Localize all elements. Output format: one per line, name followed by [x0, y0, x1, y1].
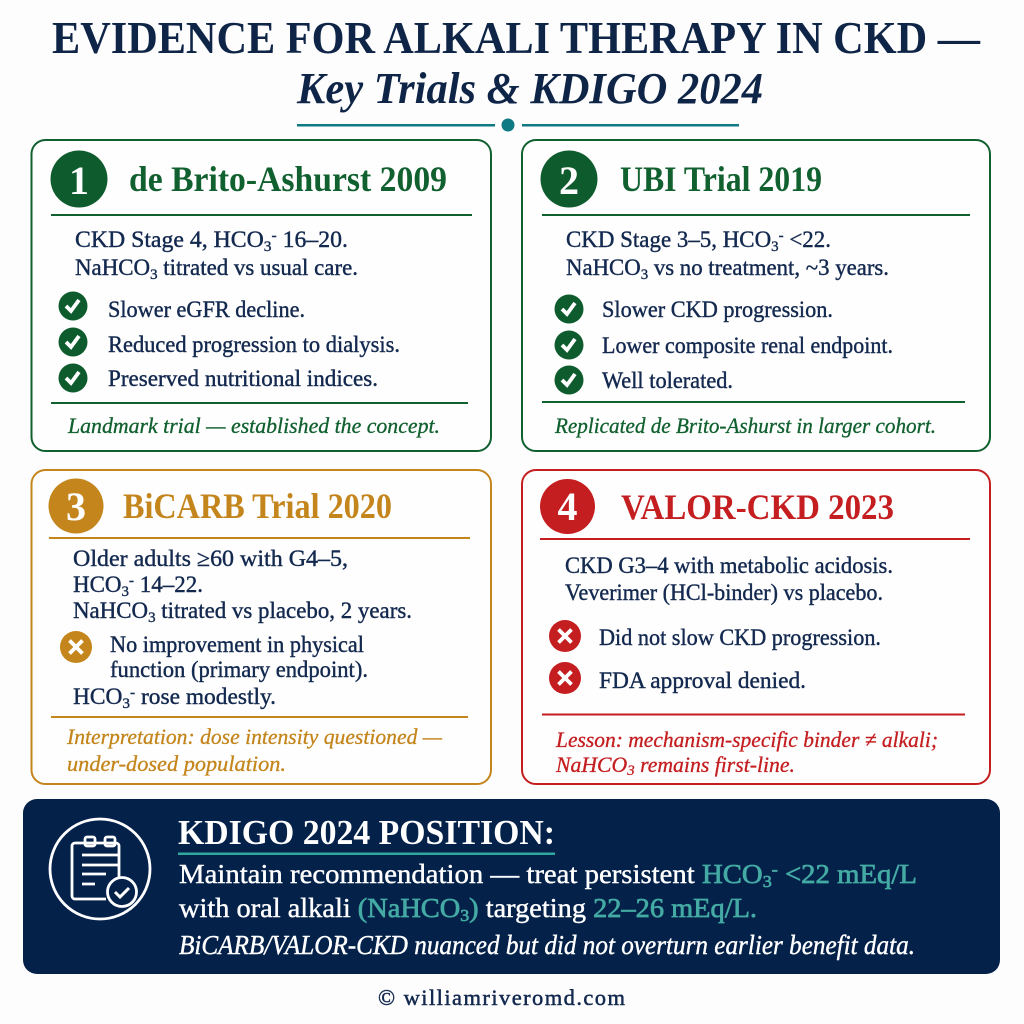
takeaway: Interpretation: dose intensity questioned —: [66, 724, 442, 749]
number badge 2: [540, 150, 598, 208]
title divider: [297, 118, 739, 132]
finding with cross icon: No improvement in physical: [110, 632, 364, 657]
title: Key Trials & KDIGO 2024: [296, 64, 763, 113]
number badge 1: [50, 150, 108, 208]
panel: UBI Trial 2019: [522, 140, 990, 451]
recommendation text: -: [772, 860, 778, 879]
panel: KDIGO 2024 position: [23, 799, 1000, 974]
takeaway: 3: [626, 763, 635, 779]
study description: CKD G3–4 with metabolic acidosis.: [565, 553, 893, 578]
findings with check icons: Slower CKD progression.: [602, 297, 833, 322]
heading: BiCARB Trial 2020: [123, 486, 392, 526]
bicarbonate note: -: [130, 685, 135, 701]
study description: [75, 227, 358, 283]
findings with check icons: Well tolerated.: [602, 368, 733, 393]
recommendation text: Maintain recommendation — treat persistent HCO: [179, 859, 759, 889]
recommendation text: 3: [460, 906, 469, 925]
recommendation text: with oral alkali (NaHCO: [179, 893, 455, 923]
study description: vs no treatment, ~3 years.: [648, 255, 889, 280]
heading: UBI Trial 2019: [620, 159, 822, 199]
study description: Veverimer (HCl-binder) vs placebo.: [565, 580, 883, 605]
recommendation text: <22 mEq/L: [778, 859, 917, 889]
bicarbonate note: rose modestly.: [135, 684, 276, 709]
number badge 1: 1: [69, 158, 89, 203]
panel: VALOR-CKD 2023: [522, 470, 990, 784]
study description: titrated vs usual care.: [158, 255, 358, 280]
study description: -: [779, 228, 784, 244]
number badge 2: 2: [559, 158, 579, 203]
study description: -: [129, 573, 134, 589]
study description: CKD Stage 3–5, HCO: [566, 227, 772, 252]
heading: KDIGO 2024 POSITION:: [178, 813, 555, 852]
finding with cross icon: function (primary endpoint).: [110, 657, 368, 682]
number badge 4: [540, 479, 595, 534]
findings with check icons: [58, 292, 400, 392]
number badge 3: 3: [66, 484, 86, 529]
findings with check icons: Preserved nutritional indices.: [108, 366, 378, 391]
findings with check icons: Lower composite renal endpoint.: [602, 333, 893, 358]
recommendation text: 3: [763, 872, 772, 891]
findings with check icons: [554, 294, 893, 394]
icon: clipboard with check: [50, 819, 150, 919]
footer credit: © williamriveromd.com: [378, 985, 625, 1010]
study description: 3: [641, 267, 648, 283]
takeaway: remains first-line.: [635, 752, 795, 777]
takeaway: [555, 727, 938, 779]
study description: 16–20.: [277, 227, 348, 252]
takeaway: Lesson: mechanism-specific binder ≠ alkali;: [555, 727, 938, 752]
recommendation text: targeting 22–26 mEq/L.: [485, 893, 749, 923]
findings with cross icons: [549, 620, 881, 694]
study description: <22.: [784, 227, 831, 252]
recommendation text: [179, 859, 917, 960]
study description: 3: [122, 584, 129, 600]
bicarbonate note: HCO: [73, 684, 122, 709]
number badge 4: 4: [558, 484, 578, 529]
recommendation text: BiCARB/VALOR-CKD nuanced but did not overturn earlier benefit data.: [179, 930, 915, 960]
study description: HCO: [73, 572, 122, 597]
recommendation text: ): [469, 893, 479, 923]
bicarbonate note: 3: [122, 696, 130, 712]
findings with check icons: Reduced progression to dialysis.: [108, 332, 400, 357]
takeaway: under-dosed population.: [67, 751, 286, 776]
heading: VALOR-CKD 2023: [621, 487, 894, 527]
study description: CKD Stage 4, HCO: [75, 227, 258, 252]
study description: 3: [148, 610, 156, 626]
takeaway: [66, 724, 442, 776]
study description: titrated vs placebo, 2 years.: [156, 598, 412, 623]
takeaway: NaHCO: [556, 752, 628, 777]
study description: NaHCO: [73, 598, 148, 623]
study description: -: [272, 228, 277, 244]
study description: 3: [771, 239, 779, 255]
title: [52, 12, 981, 113]
study description: NaHCO: [75, 255, 150, 280]
study description: NaHCO: [566, 255, 641, 280]
study description: [73, 546, 412, 626]
study description: 3: [264, 239, 272, 255]
findings with cross icons: FDA approval denied.: [599, 668, 806, 693]
findings with cross icons: Did not slow CKD progression.: [599, 625, 881, 650]
number badge 3: [48, 478, 104, 534]
study description: [566, 227, 889, 283]
study description: [565, 553, 893, 605]
takeaway: Replicated de Brito-Ashurst in larger cohort.: [554, 413, 936, 438]
finding with cross icon: [60, 631, 368, 682]
panel: de Brito-Ashurst 2009: [32, 140, 491, 451]
findings with check icons: Slower eGFR decline.: [108, 297, 305, 322]
takeaway: Landmark trial — established the concept.: [67, 413, 440, 438]
panel: BiCARB Trial 2020: [32, 470, 491, 784]
study description: 14–22.: [134, 572, 203, 597]
study description: Older adults ≥60 with G4–5,: [73, 546, 348, 571]
study description: 3: [150, 267, 158, 283]
heading: de Brito-Ashurst 2009: [129, 159, 447, 199]
